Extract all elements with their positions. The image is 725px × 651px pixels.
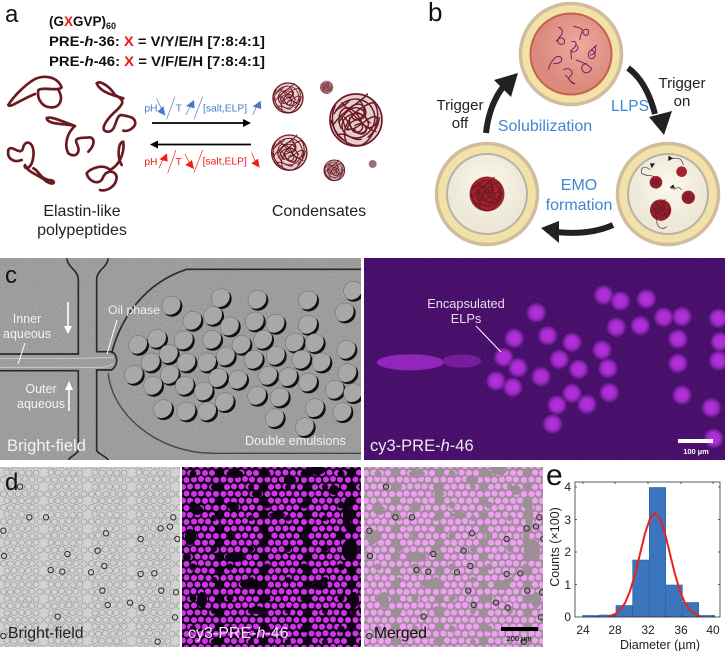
y tick labels: 1 [564,578,571,592]
dark-ringed droplets [1,484,180,644]
mauve background [364,467,543,647]
lower-left capsule: mature condensate [436,144,538,244]
pink droplet field [364,467,543,647]
blue condition labels: T [176,104,183,115]
double-emulsion droplets [124,281,364,438]
fluorescent droplets [486,285,725,449]
panel c right: fluorescence image [364,258,725,460]
image noise [0,258,361,460]
lower-right capsule: emerging condensates [618,144,718,244]
histogram bars [583,488,715,617]
y axis title: Counts (×100) [548,507,562,587]
microfluidic channels [0,258,362,460]
arrow: solubilization [486,73,518,133]
label: cy3-PRE-h-46: cy3-PRE-h-46 [188,625,289,642]
labels: inner aqueous: Inner [13,312,41,326]
gaussian fit [610,513,700,616]
sequence formula block: PRE-h-46: X = V/F/E/H [7:8:4:1] [49,54,265,69]
flow arrows [64,302,73,411]
labels: outer aqueous: aqueous [17,397,65,411]
label: encapsulated ELPs: ELPs [451,311,481,326]
x tick labels: 36 [674,623,688,637]
empty regions [183,465,359,614]
text: LLPS: LLPS [611,98,649,115]
panel letter e: e [546,459,563,492]
red condition labels [144,150,260,173]
black background [182,467,361,647]
sequence formula block: (GXGVP) [49,14,106,29]
purple background [364,258,725,460]
leader line [476,326,501,352]
y tick labels: 2 [564,545,571,559]
text: trigger off: off [452,115,469,132]
red condition labels: T [176,157,183,168]
panel e: diameter histogram [546,459,720,651]
panel letter d: d [5,469,18,496]
scale bar: 200 um: 200 µm [506,634,532,643]
text: trigger on: Trigger [659,75,705,92]
scattered gaps [364,470,530,645]
sequence formula block [49,14,265,69]
x tick labels: 28 [608,623,622,637]
leader lines [18,320,117,364]
gray background with droplets [0,467,180,647]
label: double emulsions: Double emulsions [245,434,346,448]
magenta droplet field [182,467,361,647]
scale bar: 100 um: 100 µm [683,447,709,456]
droplet field [0,467,180,647]
forward and reverse arrows [150,119,251,148]
y tick labels: 3 [564,513,571,527]
label: encapsulated ELPs: Encapsulated [427,296,505,311]
blue condition labels [144,97,261,119]
scale bar: 100 um [678,439,713,456]
elastin-like polypeptide coils [8,77,135,190]
panel a: ELP phase behaviour [5,1,382,239]
label: oil phase: Oil phase [108,303,160,317]
red condition labels: pH [144,157,158,168]
blue condition labels: [salt,ELP] [203,104,247,115]
text: solubilization: Solubilization [498,118,592,135]
x tick labels: 40 [706,623,720,637]
scale bar: 200 um [501,627,538,643]
fluorescent stream [377,354,481,370]
x tick labels: 24 [576,623,590,637]
panel letter a: a [5,1,19,28]
arrow: EMO formation [541,221,613,243]
top capsule: dissolved ELPs [520,4,622,104]
text: EMO formation: EMO [561,177,597,194]
text: trigger on: on [674,93,690,110]
caption: condensates: Condensates [272,203,366,220]
panel letter c: c [5,262,17,289]
empty regions [365,465,541,614]
text: EMO formation: formation [546,197,612,214]
scattered gaps [182,467,361,647]
labels: inner aqueous: aqueous [3,327,51,341]
x tick labels [576,623,720,637]
panel b: trigger cycle [428,0,718,244]
arrow: LLPS [628,68,672,135]
sequence formula block: PRE-h-36: X = V/Y/E/H [7:8:4:1] [49,34,265,49]
sequence formula block: 60 [106,21,116,31]
axes frame and ticks [575,482,720,617]
red condition labels: [salt,ELP] [203,156,247,167]
y tick labels: 0 [564,610,571,624]
label: cy3-PRE-h-46: cy3-PRE-h-46 [370,437,474,455]
panel d middle: fluorescence [182,465,361,647]
caption: elastin-like polypeptides: polypeptides [37,222,127,239]
image noise [364,258,725,460]
dark-ringed droplets [367,484,546,644]
label: bright-field: Bright-field [8,625,84,642]
text: trigger off: Trigger [437,97,483,114]
y tick labels: 4 [564,480,571,494]
panel c left: bright-field microfluidic device [0,258,364,460]
label: bright-field: Bright-field [7,437,86,455]
panel d left: bright-field [0,467,180,647]
x tick labels: 32 [641,623,655,637]
labels: outer aqueous: Outer [25,382,57,396]
gray background [0,258,361,460]
panel d right: merged [364,465,546,647]
caption: elastin-like polypeptides: Elastin-like [43,203,121,220]
y tick labels [564,480,571,624]
label: merged: Merged [374,625,427,642]
blue condition labels: pH [144,104,158,115]
condensate droplets [272,81,382,181]
